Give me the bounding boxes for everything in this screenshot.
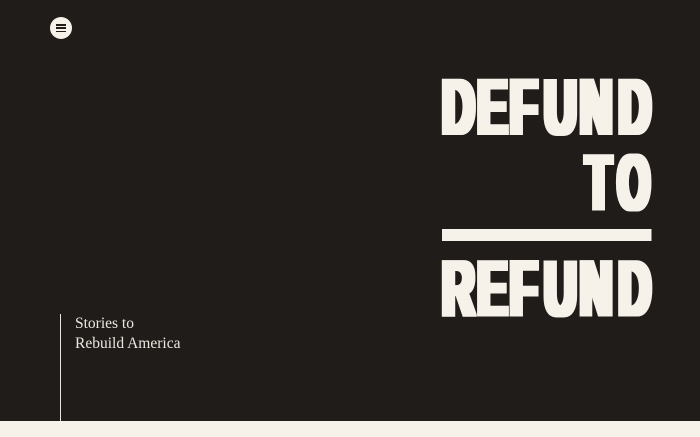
tagline text: Rebuild America: [75, 334, 180, 352]
title divider bar: [442, 229, 652, 241]
title line: TO: TO: [586, 139, 650, 227]
title line: DEFUND: DEFUND: [442, 62, 651, 151]
tagline text: Stories to: [75, 315, 134, 332]
tagline text: [75, 315, 180, 352]
vertical rule: [60, 314, 61, 422]
bottom cream band: [0, 421, 700, 437]
icon: hamburger menu button: [50, 17, 72, 39]
title line: REFUND: REFUND: [442, 244, 651, 333]
